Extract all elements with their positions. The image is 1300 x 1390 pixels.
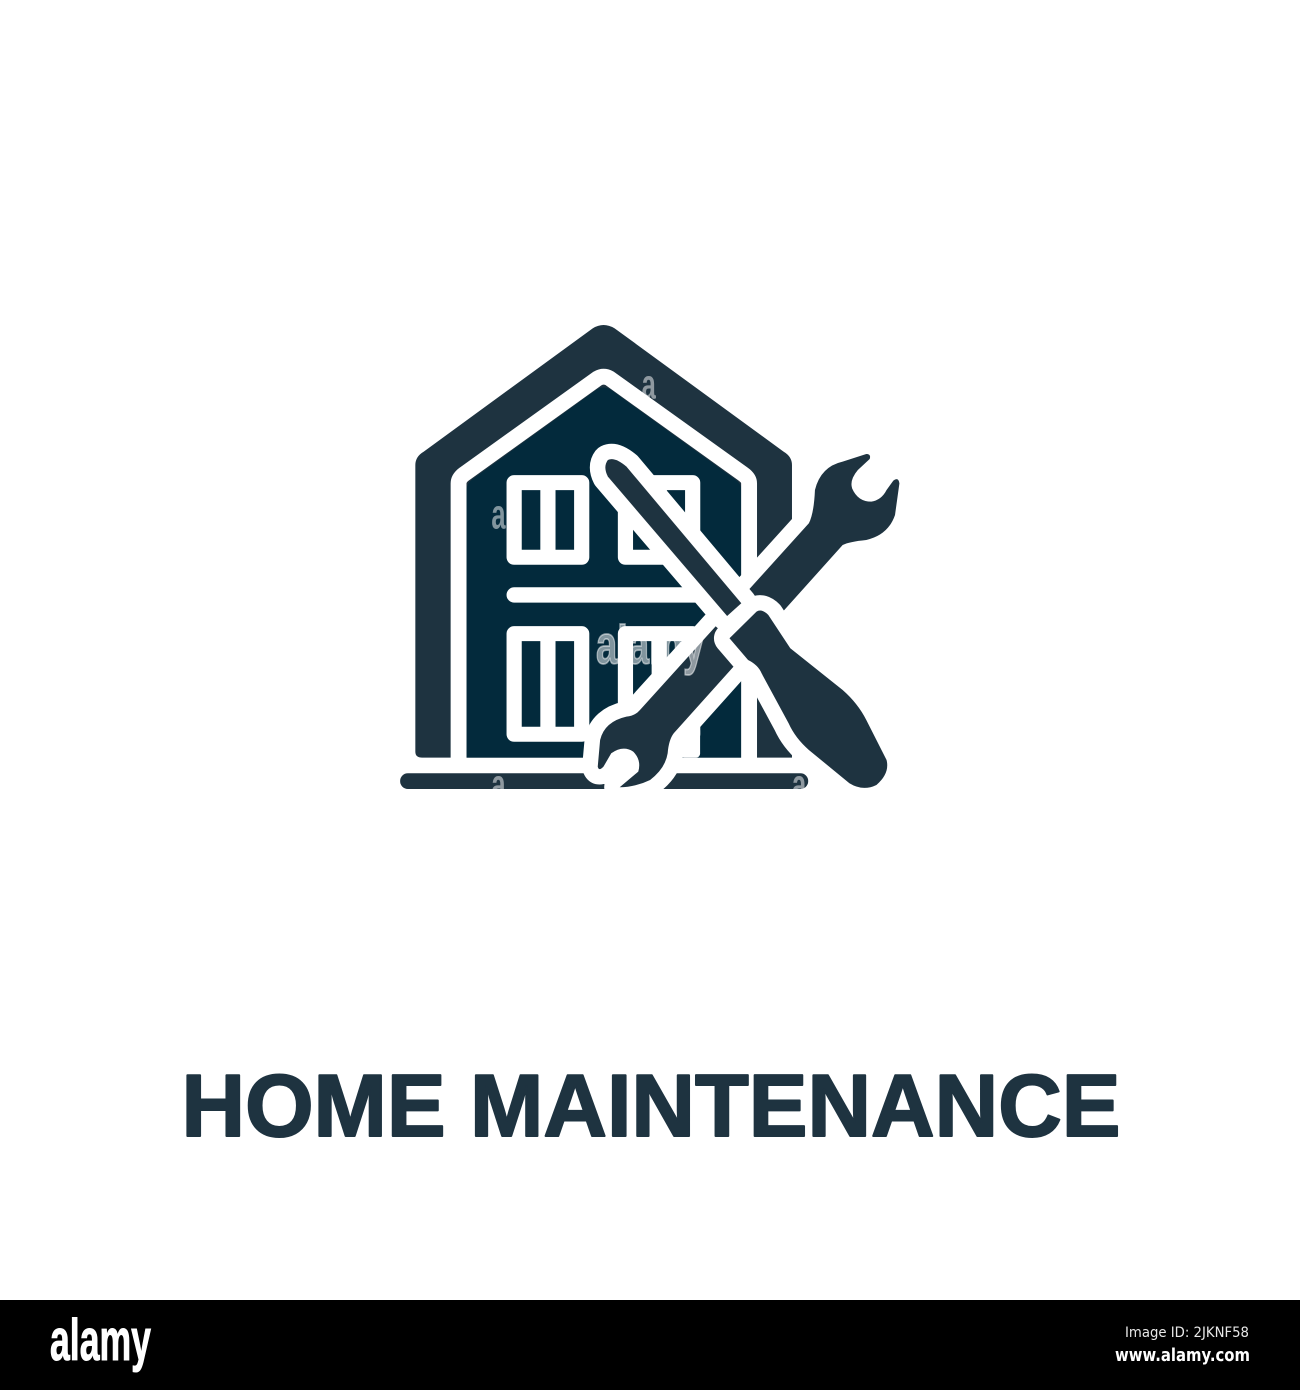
watermark fragments: alamy bbox=[596, 614, 704, 675]
house inner panel bbox=[467, 387, 741, 758]
watermark fragments: a bbox=[491, 761, 506, 807]
title: HOME MAINTENANCE bbox=[182, 1056, 1120, 1155]
house outer silhouette bbox=[415, 325, 792, 758]
footer bar bbox=[0, 1300, 1300, 1390]
ground line bbox=[400, 773, 808, 789]
watermark fragments: a bbox=[642, 361, 656, 407]
icon: house with crossed tools bbox=[400, 325, 899, 807]
watermark fragments bbox=[491, 361, 807, 807]
screwdriver bbox=[605, 459, 887, 788]
house white outline band bbox=[459, 377, 749, 758]
alamy logo: alamy bbox=[50, 1308, 151, 1373]
wrench bbox=[598, 454, 899, 787]
website: www.alamy.com bbox=[1115, 1345, 1250, 1366]
watermark fragments: a bbox=[491, 491, 506, 537]
watermark fragments: a bbox=[792, 761, 807, 807]
image id: Image ID: 2JKNF58 bbox=[1125, 1325, 1249, 1341]
windows and floor divider bbox=[514, 483, 711, 758]
